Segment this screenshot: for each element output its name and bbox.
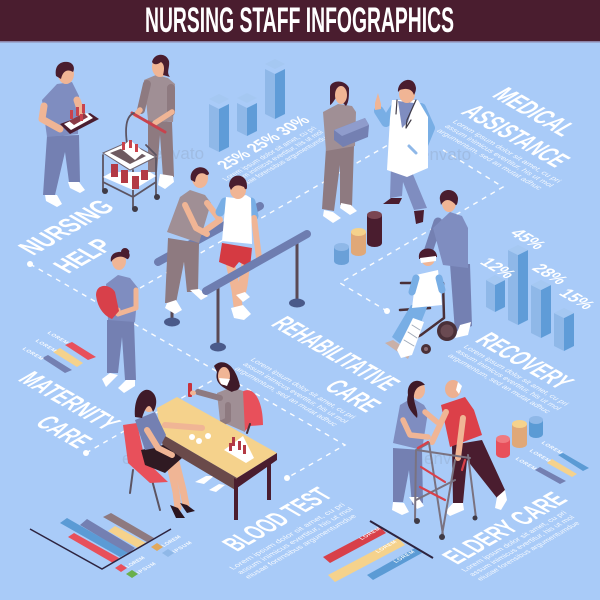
horizontal bars: elderly care: LOREM — [393, 550, 417, 564]
horizontal bars: elderly care: LOREM — [359, 527, 383, 541]
connector end dots — [27, 261, 390, 481]
legend: elderly care — [513, 441, 589, 484]
text block: nursing help chart: assum inimicus evertitur, his ut mol — [227, 129, 326, 186]
horizontal bars: elderly care — [323, 521, 433, 582]
text block: recovery: assum inimicus evertitur, his ut mol — [453, 348, 564, 412]
heading: maternity care: CARE — [29, 411, 99, 452]
chart legend: blood test: IPSUM — [172, 541, 194, 554]
envato watermarks: envato — [424, 449, 475, 468]
envato watermarks: envato — [153, 144, 204, 163]
heading: medical assistance — [455, 83, 584, 171]
stacked bar chart: blood test — [30, 513, 171, 569]
chart legend: blood test: IPSUM — [136, 562, 158, 575]
text block: medical assistance: argumentum, sed an mutat adhuc — [435, 127, 545, 191]
elderly care scene: nurse, man, walker — [392, 380, 507, 540]
text block: blood test — [227, 501, 363, 580]
text block: blood test: assum inimicus evertitur, his ut mol — [235, 506, 355, 576]
heading: nursing help: HELP — [46, 234, 120, 277]
legend: elderly care: LOREM — [539, 441, 564, 455]
envato watermarks: envato — [122, 449, 173, 468]
heading: nursing help: NURSING — [11, 195, 121, 259]
cylinders: elderly care — [496, 416, 543, 458]
legend: elderly care: LOREM — [527, 449, 552, 463]
text block: rehabilitative care: assum inimicus evertitur, his ut mol — [240, 361, 351, 425]
horizontal bars: elderly care: LOREM — [375, 540, 399, 554]
patient in wheelchair — [385, 248, 457, 359]
text block: recovery: argumentum, sed an mutat adhuc — [446, 352, 553, 415]
percent labels: recovery: 45% — [506, 226, 551, 252]
nurse with newborn — [96, 248, 138, 393]
doctor in white coat — [375, 80, 430, 224]
text block: blood test: eiusae forensibus argumentumdue — [243, 513, 359, 580]
heading: maternity care — [12, 367, 127, 452]
heading: rehabilitative care: CARE — [318, 375, 388, 416]
text block: eldery care: Lorem ipsum dolor sit amet, cu pri — [459, 509, 569, 573]
text block: rehabilitative care: Lorem ipsum dolor sit amet, cu pri — [248, 356, 359, 420]
bar chart: nursing help — [209, 59, 285, 152]
woman carrying box — [322, 82, 369, 223]
bar chart: recovery — [486, 245, 574, 351]
chart legend: blood test: LOREM — [125, 556, 147, 569]
heading: nursing help — [11, 195, 121, 277]
blood test scene: table, patient, nurse — [123, 362, 277, 520]
heading: rehabilitative care — [265, 312, 407, 416]
legend: maternity care: LOREM — [33, 339, 58, 353]
percent labels: recovery: 28% — [528, 261, 573, 287]
text block: blood test: Lorem ipsum dolor sit amet, cu pri — [227, 501, 348, 571]
text block: medical assistance: Lorem ipsum dolor sit amet, cu pri — [450, 118, 564, 184]
heading: rehabilitative care: REHABILITATIVE — [265, 312, 407, 395]
dashed connector lines — [30, 145, 503, 478]
heading: blood test: BLOOD TEST — [215, 483, 339, 555]
text block: recovery: Lorem ipsum dolor sit amet, cu pri — [461, 343, 572, 407]
chart legend: blood test: LOREM — [161, 535, 183, 548]
nurse pushing wheelchair — [426, 190, 472, 338]
percent labels: nursing help: 25% 25% 30% — [212, 113, 314, 172]
envato watermarks: envato — [420, 145, 471, 164]
title banner — [0, 0, 600, 42]
rehabilitation: bars, therapist and patient — [158, 167, 307, 352]
legend: maternity care — [20, 331, 96, 373]
envato watermarks — [122, 144, 475, 468]
cylinders: medical — [334, 211, 382, 265]
text block: eldery care: assum inimicus evertitur, his ut mol — [467, 514, 577, 578]
chart legend: blood test — [115, 535, 194, 578]
percent labels: recovery — [476, 226, 600, 312]
text block: eldery care: eiusae forensibus argumentumdue — [475, 520, 582, 582]
text block: nursing help chart: eiusae forensibus argumentumdue — [234, 133, 333, 190]
nurse with blood tray — [42, 62, 99, 207]
nurse pushing cart — [102, 55, 175, 212]
percent labels: recovery: 12% — [476, 255, 521, 281]
heading: maternity care: MATERNITY — [12, 367, 127, 434]
legend: maternity care: LOREM — [20, 347, 45, 361]
legend: elderly care: LOREM — [513, 457, 538, 471]
text block: nursing help chart: Lorem ipsum dolor sit amet, cu pri — [220, 125, 319, 182]
legend: maternity care: LOREM — [45, 331, 70, 345]
text block: rehabilitative care: argumentum, sed an mutat adhuc — [233, 365, 340, 428]
text block: medical assistance: assum inimicus evertitur, his ut mol — [442, 123, 556, 189]
